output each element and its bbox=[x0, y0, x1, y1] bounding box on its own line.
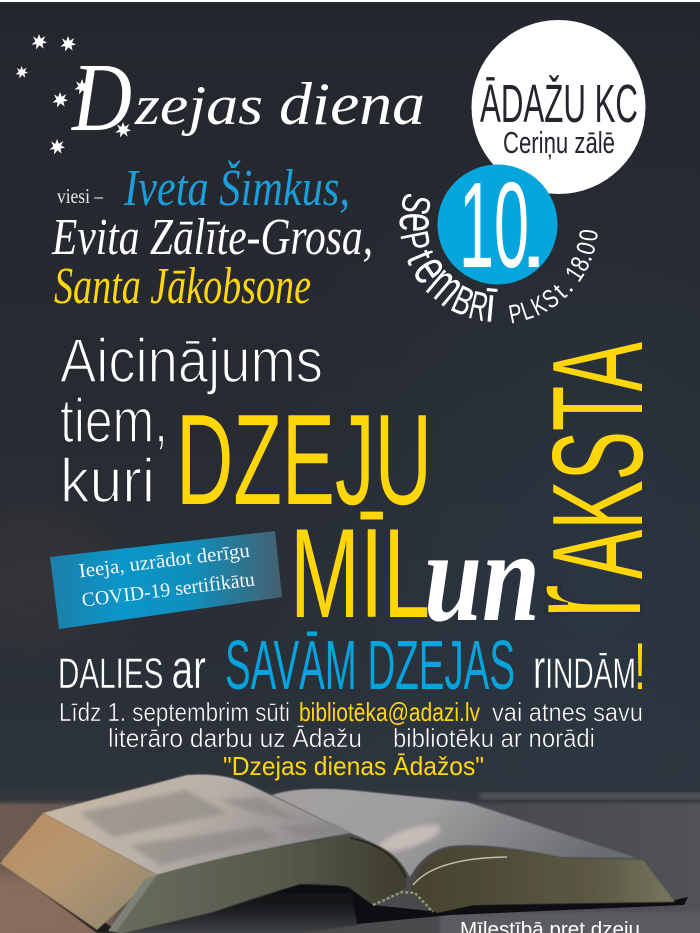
title: Dzejas diena: diena bbox=[279, 71, 425, 137]
guests bbox=[51, 159, 373, 315]
blue circle: date: 10 bbox=[459, 157, 529, 293]
instructions: bibliotēku ar norādi bbox=[393, 723, 595, 753]
instructions: "Dzejas dienas Ādažos" bbox=[223, 751, 484, 781]
curved text: month: R bbox=[465, 282, 492, 330]
curved text: month: P bbox=[391, 227, 438, 254]
share line: DALIES ar bbox=[58, 637, 206, 700]
share line: rINDĀM bbox=[533, 637, 636, 700]
guests: Santa Jākobsone bbox=[54, 258, 311, 315]
front page edges bbox=[116, 837, 407, 933]
call to poets: white lines: tiem, bbox=[60, 387, 168, 456]
curved text: time: K bbox=[526, 289, 551, 321]
rotated word: RAKSTA bbox=[479, 342, 681, 621]
curved text: time bbox=[506, 228, 603, 329]
white circle: venue: Ceriņu zālē bbox=[503, 125, 615, 160]
white circle: venue bbox=[472, 20, 646, 194]
instructions: bibliotēka@adazi.lv bbox=[299, 697, 480, 727]
share line bbox=[58, 626, 646, 704]
title: Dzejas diena: D bbox=[70, 44, 132, 152]
open book bbox=[0, 774, 688, 933]
script word: un: un bbox=[424, 505, 540, 649]
curved text: time: 0 bbox=[571, 239, 601, 258]
instructions: Līdz 1. septembrim sūti bbox=[59, 697, 290, 727]
blue circle: date bbox=[438, 157, 558, 293]
share line: ! bbox=[634, 629, 646, 703]
curved text: month: t bbox=[397, 244, 443, 271]
curved text: time: P bbox=[506, 298, 525, 329]
curved text: month bbox=[388, 189, 499, 333]
wooden table bbox=[0, 789, 700, 933]
curved text: time: . bbox=[552, 272, 579, 298]
title: Dzejas diena: zejas bbox=[134, 75, 263, 137]
curved text: time: 1 bbox=[559, 261, 590, 286]
curved text: month: m bbox=[416, 252, 477, 317]
stars bbox=[16, 34, 131, 154]
curved text: time: L bbox=[517, 294, 537, 326]
blue tag: entry note: Ieeja, uzrādot derīgu bbox=[78, 540, 251, 582]
headline word: DZEJU: DZEJU bbox=[176, 388, 432, 532]
curved text: time: t bbox=[548, 279, 572, 305]
curved text: time: 8 bbox=[565, 252, 595, 275]
curved text: time: . bbox=[568, 248, 598, 265]
call to poets: white lines bbox=[60, 327, 323, 516]
rotated word: RAKSTA: AKSTA bbox=[526, 342, 670, 579]
blue tag: entry note bbox=[50, 531, 282, 629]
right page bbox=[272, 789, 637, 877]
left page bbox=[43, 774, 350, 875]
book shadow and cover bbox=[0, 858, 688, 933]
left fore-edge bbox=[0, 813, 157, 930]
blue circle: date: . bbox=[524, 204, 543, 282]
guests: Evita Zālīte-Grosa, bbox=[51, 209, 373, 266]
curved text: month: B bbox=[445, 278, 480, 326]
headline word: MĪL: MĪL bbox=[290, 502, 430, 644]
title: Dzejas diena bbox=[70, 44, 425, 152]
instructions: vai atnes savu bbox=[492, 697, 643, 727]
curved text: month: e bbox=[402, 244, 463, 294]
left page text blocks bbox=[80, 790, 350, 865]
curved text: time: 0 bbox=[574, 228, 603, 243]
curved text: month: ī bbox=[483, 276, 499, 333]
guests: viesi – bbox=[57, 184, 103, 208]
curved text: time: S bbox=[536, 283, 564, 314]
curved text: month: S bbox=[392, 189, 439, 219]
instructions bbox=[59, 697, 643, 781]
rotated word: RAKSTA: r bbox=[479, 583, 681, 621]
instructions: literāro darbu uz Ādažu bbox=[108, 723, 362, 753]
curved text: month: e bbox=[388, 212, 449, 233]
call to poets: white lines: kuri bbox=[60, 447, 155, 516]
guests: Iveta Šimkus, bbox=[123, 159, 350, 217]
blue tag: entry note: COVID-19 sertifikātu bbox=[81, 569, 256, 612]
call to poets: white lines: Aicinājums bbox=[60, 327, 323, 396]
